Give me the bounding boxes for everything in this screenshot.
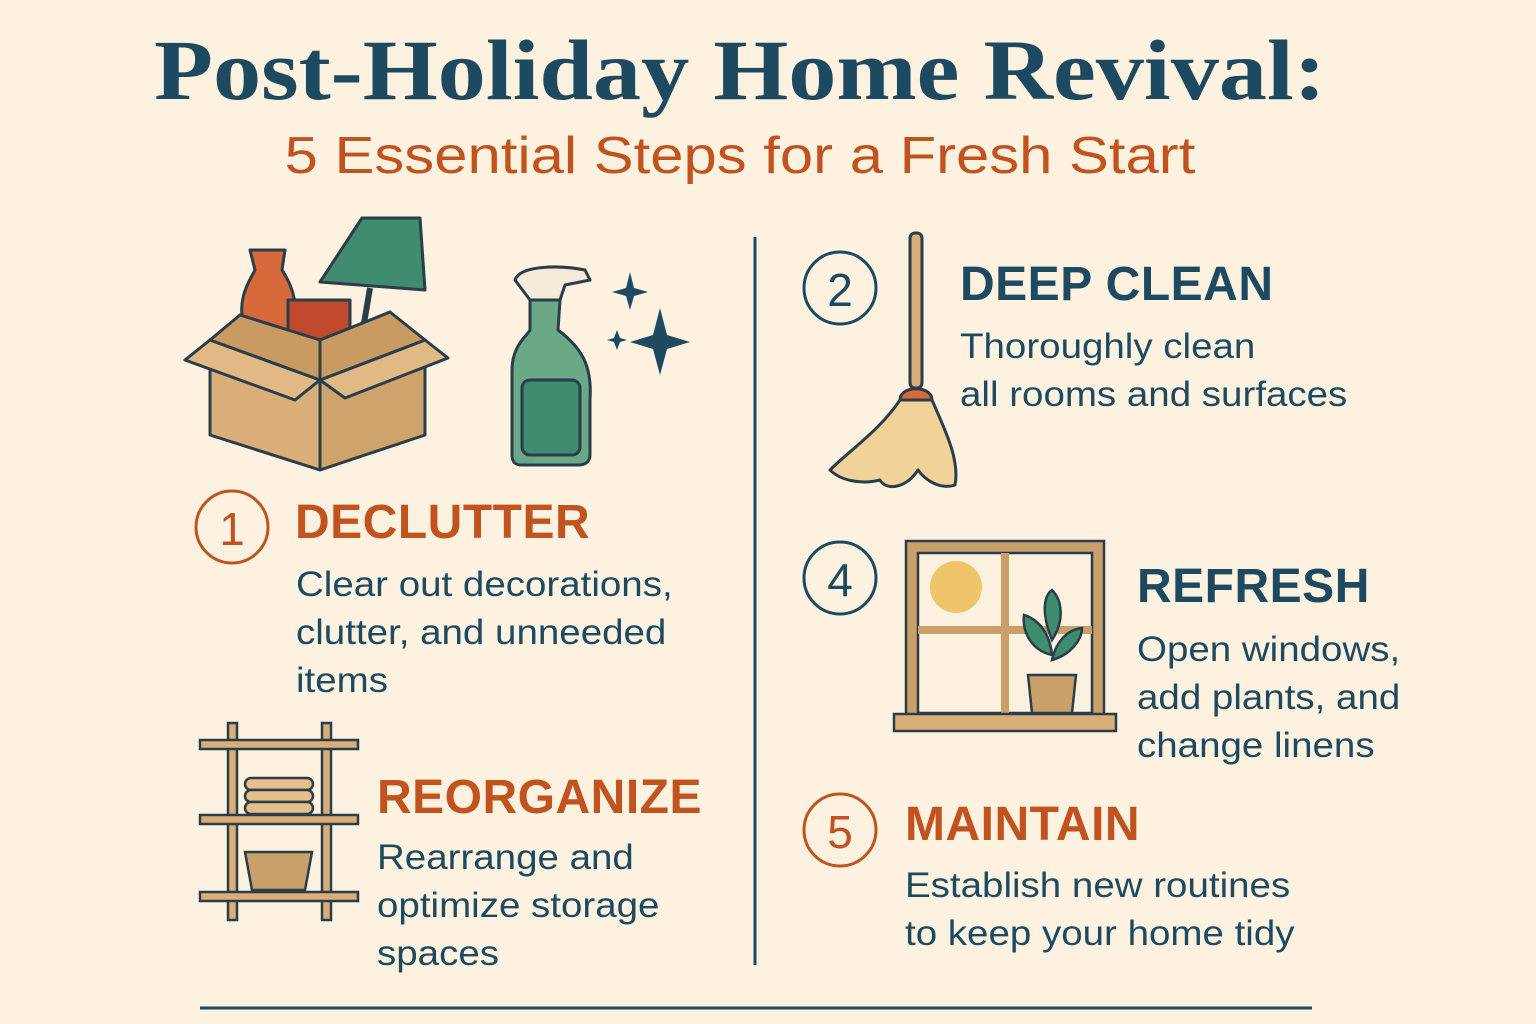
heading: declutter: DECLUTTER <box>295 496 590 549</box>
text: reorganize: spaces <box>377 934 499 973</box>
icon: circle 5: 5 <box>827 806 853 858</box>
icon: mop <box>830 233 956 487</box>
icon: spray bottle <box>512 267 590 465</box>
title: Post-Holiday Home Revival: <box>154 22 1326 118</box>
icon: circle 4: 4 <box>827 554 853 606</box>
text: deep clean: all rooms and surfaces <box>960 375 1347 414</box>
icon: circle 4 <box>804 542 876 614</box>
icon: circle 5 <box>804 794 876 866</box>
text: refresh <box>1137 630 1400 765</box>
text: reorganize <box>377 838 659 973</box>
icon: circle 1: 1 <box>219 503 245 555</box>
text: refresh: Open windows, <box>1137 630 1400 669</box>
icon: circle 2: 2 <box>827 264 853 316</box>
subtitle: 5 Essential Steps for a Fresh Start <box>285 127 1195 185</box>
text: maintain: to keep your home tidy <box>905 914 1295 953</box>
heading: reorganize: REORGANIZE <box>377 771 702 824</box>
icon: sparkles <box>607 272 690 375</box>
text: refresh: change linens <box>1137 726 1375 765</box>
text: maintain: Establish new routines <box>905 866 1290 905</box>
icon: window with plant <box>894 541 1116 731</box>
text: declutter: items <box>296 661 388 700</box>
heading: refresh: REFRESH <box>1137 560 1370 613</box>
heading: deep clean: DEEP CLEAN <box>960 258 1274 311</box>
text: declutter: clutter, and unneeded <box>296 613 666 652</box>
icon: circle 2 <box>804 252 876 324</box>
icon: circle 1 <box>196 491 268 563</box>
text: deep clean: Thoroughly clean <box>960 327 1255 366</box>
text: refresh: add plants, and <box>1137 678 1400 717</box>
heading: maintain: MAINTAIN <box>905 798 1140 851</box>
text: reorganize: optimize storage <box>377 886 659 925</box>
text: declutter <box>296 565 673 700</box>
text: deep clean <box>960 327 1347 414</box>
icon: box with items <box>185 218 448 470</box>
icon: shelf <box>200 723 358 920</box>
text: reorganize: Rearrange and <box>377 838 634 877</box>
text: maintain <box>905 866 1295 953</box>
text: declutter: Clear out decorations, <box>296 565 673 604</box>
